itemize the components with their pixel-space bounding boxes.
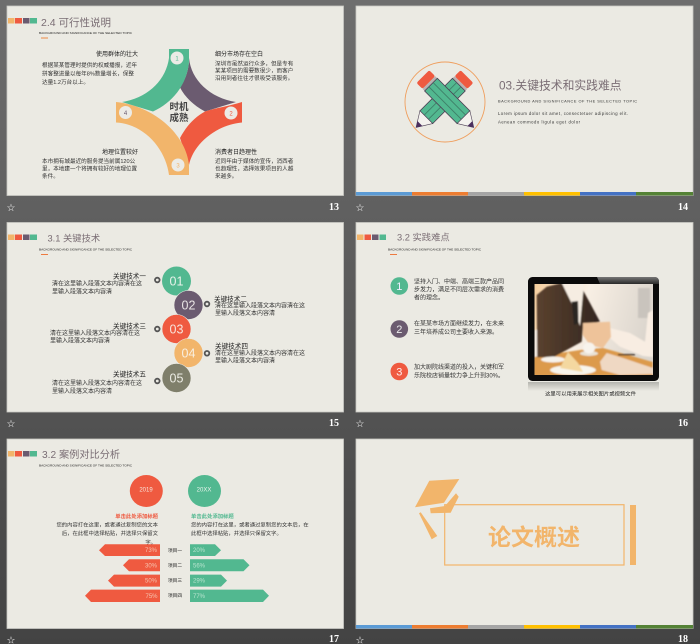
row labels: 项目二	[168, 563, 182, 569]
right description: 此框中选择粘贴，并选择只保留文字。	[191, 529, 282, 537]
slide 14: section divider	[356, 6, 693, 196]
year circle 2019	[130, 475, 163, 507]
text: market gap: 某某项目的需要数很少，而客户	[215, 66, 293, 74]
left bar chart: 50%	[145, 579, 158, 585]
petal: red	[180, 102, 242, 165]
numbered circles: 04	[182, 346, 195, 360]
left bar chart: 75%	[145, 594, 158, 600]
footer 15: ☆	[6, 419, 16, 430]
text: consumers	[215, 148, 294, 180]
number nodes: 4	[124, 111, 128, 117]
right bar chart: 29%	[193, 579, 206, 585]
right description	[191, 512, 309, 537]
text items: 关键技术二	[214, 294, 247, 304]
colour bar	[356, 625, 693, 628]
text: market gap: 细分市场存在空白	[215, 50, 263, 58]
pencil: front	[416, 70, 480, 134]
slide 17: case comparison	[7, 439, 344, 628]
slide 15: key technology	[7, 222, 344, 412]
footer 18	[356, 634, 688, 644]
numbered circles: 01	[170, 274, 183, 288]
point 1: 者的理念。	[414, 294, 444, 302]
footer 13: 13	[329, 202, 339, 213]
petal: orange	[116, 102, 189, 175]
text items: 清在这里输入段落文本内容清在这	[215, 349, 305, 357]
point 2	[390, 320, 504, 338]
connector dots	[155, 278, 209, 383]
colour squares	[8, 18, 37, 24]
right bar chart: 20%	[193, 548, 206, 554]
text items: 关键技术一	[113, 272, 146, 280]
right bar chart	[190, 544, 269, 602]
row labels: 项目一	[168, 548, 182, 554]
numbered circles: 05	[170, 372, 183, 386]
text: consumers: 消费者日趋理性	[215, 148, 257, 156]
left description	[56, 512, 159, 546]
text: consumers: 近同年由于媒体的宣传，消西者	[215, 157, 294, 165]
point 1: 坚持入门、中端、高端三款产品同	[414, 278, 504, 286]
text items: 清在这里输入段落文本内容清在这	[52, 379, 142, 387]
text items: 里输入段落文本内容清	[215, 356, 275, 364]
numbered circles	[162, 266, 203, 392]
point 1: 步发力，满足不同层次需求的消费	[414, 286, 504, 294]
heading	[39, 232, 133, 255]
row labels: 项目四	[168, 593, 182, 599]
text: users	[42, 50, 138, 86]
colour squares	[357, 234, 386, 240]
photo: handshake	[534, 283, 653, 376]
text: location: 地理位置较好	[102, 148, 138, 156]
row labels: 项目三	[168, 578, 182, 584]
text items: 里输入段落文本内容清	[215, 309, 275, 317]
colour squares	[8, 234, 37, 240]
point 2: 2	[396, 324, 402, 336]
text: consumers: 来越多。	[215, 172, 237, 180]
section subtitle: BACKGROUND AND SIGNIFICANCE OF THE SELECTED TOPIC	[498, 98, 637, 104]
centre label: 时机	[169, 102, 189, 113]
text items: 清在这里输入段落文本内容清在这	[52, 280, 142, 288]
heading: 2.4 可行性说明	[41, 16, 111, 29]
numbered circles: 02	[182, 298, 195, 312]
footer 17	[6, 634, 339, 644]
section title: 03.关键技术和实践难点	[499, 78, 622, 92]
text items: 里输入段落文本内容清	[52, 288, 112, 296]
year circle 2019: 2019	[139, 488, 153, 494]
point 3: 3	[396, 366, 402, 378]
text: users: 拼客整进量以每年8%数量增长，保整	[42, 70, 134, 78]
heading	[39, 448, 133, 468]
year circle 20XX	[188, 475, 221, 507]
text: users: 达量1.2万台以上。	[42, 78, 89, 86]
footer 16: 16	[678, 418, 688, 429]
heading	[39, 16, 133, 38]
icon: crossed pencils	[405, 62, 485, 142]
text items: 关键技术四	[215, 342, 248, 350]
slide 13: feasibility	[7, 6, 344, 196]
colour bar	[356, 192, 693, 196]
text: location: 条件。	[42, 172, 59, 180]
footer 16: ☆	[356, 419, 364, 430]
left description: 后，在此框中选择粘贴，并选择只保留文	[62, 529, 159, 537]
heading: 3.1 关键技术	[48, 232, 100, 244]
point 2: 在某某市场方面继续发力，在未来	[414, 320, 504, 328]
point 3: 加大剧院线渠道的投入，关键和军	[414, 363, 504, 371]
heading: BACKGROUND AND SIGNIFICANCE OF THE SELECTED TOPIC	[39, 31, 133, 35]
title frame	[445, 505, 624, 565]
footer 14: 14	[678, 202, 688, 213]
left bar chart	[85, 544, 160, 602]
text items: 清在这里输入段落文本内容清在这	[215, 302, 305, 310]
tablet reflection	[528, 382, 659, 391]
numbered circles: 03	[170, 322, 183, 336]
text: users: 根据某某管理时提供的权威播报，近年	[42, 61, 138, 69]
text items: 里输入段落文本内容清	[52, 387, 112, 395]
point 3: 乐院校店销量较力争上升到30%。	[414, 372, 504, 380]
heading	[388, 232, 482, 255]
lorem text: Lorem ipsum dolor sit amet, consectetuer adipiscing elit.	[498, 111, 628, 116]
petal diagram	[116, 49, 242, 175]
text: location: 里，本地建一个将拥有较好的地理位置	[42, 164, 138, 172]
photo caption: 这里可以用来展示相关图片或视频文件	[545, 390, 637, 398]
text: location	[42, 148, 138, 180]
left description: 字。	[145, 538, 156, 546]
heading: 3.2 案例对比分析	[42, 448, 120, 461]
right description: 您的内容打在这里，或者通过复制您的文本后，在	[191, 520, 309, 528]
footer 13: ☆	[6, 203, 16, 214]
number nodes	[119, 52, 238, 172]
text: users: 使用群体的壮大	[96, 50, 138, 58]
right description: 单击此处添加标题	[191, 512, 234, 520]
title text: 论文概述	[488, 524, 580, 550]
footer 16	[356, 418, 688, 430]
centre label: 成熟	[169, 112, 189, 124]
tablet with photo	[528, 277, 659, 381]
point 1	[390, 277, 504, 302]
footer 15	[6, 418, 339, 430]
text items: 关键技术三	[113, 322, 146, 330]
right bar chart: 56%	[193, 563, 206, 569]
number nodes: 1	[175, 56, 179, 62]
year circle 20XX: 20XX	[197, 488, 211, 494]
footer 13	[6, 202, 339, 214]
point 1: 1	[396, 281, 402, 293]
footer 15: 15	[329, 418, 339, 429]
lorem text: Aenean commodo ligula eget dolor	[498, 120, 581, 124]
text: consumers: 也趋理性，选择效果项目的人越	[215, 164, 294, 172]
heading: BACKGROUND AND SIGNIFICANCE OF THE SELECTED TOPIC	[39, 464, 133, 468]
number nodes: 3	[176, 164, 180, 170]
slide 16: practice difficulties	[356, 222, 693, 412]
text: location: 本市拥有城最近的服务提当前属120公	[42, 157, 136, 165]
text items	[50, 272, 305, 395]
text: market gap: 深圳市虽然运行众多，但是专有	[215, 60, 294, 68]
point 2: 三年培养成公司主要收入来源。	[414, 328, 498, 336]
heading: BACKGROUND AND SIGNIFICANCE OF THE SELECTED TOPIC	[39, 248, 133, 252]
text items: 里输入段落文本内容清	[50, 336, 110, 344]
heading: 3.2 实践难点	[397, 232, 450, 242]
icon: graduation cap	[415, 479, 459, 539]
side bar	[630, 505, 636, 565]
footer 14: ☆	[356, 203, 364, 214]
point 3	[390, 363, 504, 380]
footer 14	[356, 202, 688, 214]
heading: BACKGROUND AND SIGNIFICANCE OF THE SELECTED TOPIC	[388, 248, 482, 252]
lorem text	[498, 111, 628, 124]
left bar chart: 73%	[145, 548, 158, 554]
pencil: back	[410, 70, 473, 134]
slide 18: thesis overview	[356, 439, 693, 628]
left description: 您的内容打在这里，或者通过复制您的文本	[56, 520, 159, 528]
text: market gap	[215, 50, 294, 82]
text: market gap: 沿用到者往往才很吸受该服务。	[215, 74, 293, 82]
petal: green	[122, 49, 189, 112]
row labels	[168, 548, 182, 599]
text items: 清在这里输入段落文本内容清在这	[50, 329, 140, 337]
left bar chart: 30%	[145, 563, 158, 569]
text items: 关键技术五	[113, 370, 146, 378]
left description: 单击此处添加标题	[115, 512, 159, 520]
petal: purple	[180, 58, 236, 112]
number nodes: 2	[229, 112, 233, 118]
colour squares	[8, 451, 37, 456]
right bar chart: 77%	[193, 594, 206, 600]
